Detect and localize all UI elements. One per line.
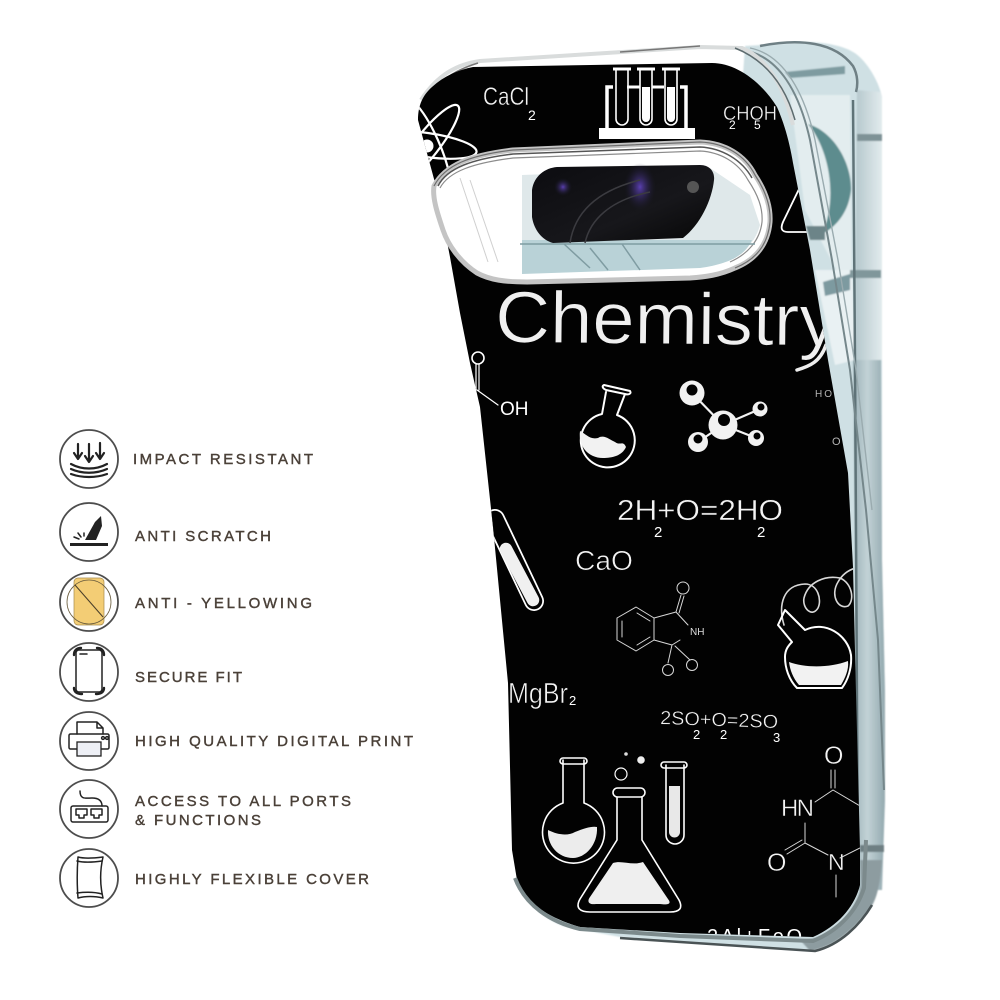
equation: sulfur: 2	[693, 727, 700, 742]
dark bottom right corner	[800, 860, 882, 951]
feature: highly flexible cover	[60, 849, 369, 907]
case print artwork	[376, 69, 860, 948]
case outline curves	[742, 50, 884, 790]
feature: secure fit	[60, 643, 242, 701]
icon: left test tube	[495, 519, 534, 601]
structure: uracil: O	[824, 742, 843, 770]
frame bars	[785, 66, 845, 78]
white glare panels	[790, 95, 852, 300]
formula: CaCl2: 2	[528, 107, 536, 123]
icon: coil flask	[778, 568, 856, 688]
panel: camera cutout	[434, 142, 770, 282]
feature: high quality digital print: HIGH QUALITY DIGITAL PRINT	[135, 733, 413, 750]
formula: C2H5OH: 5	[754, 118, 761, 132]
feature: impact resistant: IMPACT RESISTANT	[133, 451, 313, 468]
feature: access to all ports and functions	[60, 780, 351, 838]
title: Chemistry: Chemistry	[495, 277, 838, 362]
formula fragments at right edge: O	[832, 436, 841, 448]
black printed case back	[418, 63, 860, 937]
feature: anti scratch	[60, 503, 271, 561]
structure: COOH	[472, 352, 528, 420]
icon: test tube rack	[599, 69, 695, 139]
icon: erlenmeyer flask	[578, 752, 681, 912]
structure: saccharin	[617, 582, 704, 676]
icon: triangle flask	[780, 189, 807, 233]
equation: sulfur	[661, 710, 780, 742]
back phone body	[517, 42, 885, 951]
equation: water	[618, 500, 782, 537]
equation: sulfur: 2	[720, 727, 727, 742]
formula: MgBr2: 2	[569, 693, 576, 708]
feature: high quality digital print	[60, 712, 413, 770]
structure: COOH: OH	[500, 399, 528, 420]
icon: molecule	[680, 380, 768, 452]
feature: access to all ports and functions: ACCESS TO ALL PORTS	[135, 793, 351, 810]
camera ring behind the case	[808, 124, 851, 234]
feature: secure fit: SECURE FIT	[135, 669, 242, 686]
camera lens black pill	[532, 165, 714, 243]
formula: CaCl2	[484, 87, 536, 120]
equation: sulfur: 2SO+O=2SO	[660, 708, 778, 733]
icon: round flask	[580, 385, 635, 467]
panel: phone and clear case	[376, 42, 885, 951]
formula: cut off at bottom: 2Al+FeO	[707, 926, 802, 948]
structure: uracil	[767, 742, 860, 897]
feature: impact resistant	[60, 430, 313, 488]
feature: anti yellowing: ANTI - YELLOWING	[135, 595, 312, 612]
equation: water: 2	[757, 524, 765, 541]
icon: standing test tube	[661, 762, 687, 844]
structure: uracil: O	[767, 849, 786, 877]
equation: sulfur: 3	[773, 730, 780, 745]
feature: highly flexible cover: HIGHLY FLEXIBLE COVER	[135, 871, 369, 888]
lower light blue band	[522, 240, 752, 274]
structure: uracil: HN	[781, 795, 814, 822]
icon: atom	[419, 104, 478, 180]
formula: MgBr2: MgBr	[508, 678, 568, 710]
equation: water: 2H+O=2HO	[617, 495, 783, 527]
vertical seam	[853, 100, 858, 880]
formula: C2H5OH	[724, 106, 776, 129]
formula: CaCl2: CaCl	[483, 83, 529, 111]
right metal side strip	[855, 90, 882, 360]
feature: access to all ports and functions: & FUNCTIONS	[135, 812, 261, 829]
structure: saccharin: NH	[690, 627, 704, 638]
formula fragments at right edge: HO	[815, 389, 834, 400]
formula: C2H5OH: CHOH	[723, 103, 777, 125]
formula fragments at right edge	[816, 390, 840, 445]
formula: CaO: CaO	[575, 545, 633, 576]
feature: anti scratch: ANTI SCRATCH	[135, 528, 271, 545]
equation: water: 2	[654, 524, 662, 541]
formula: C2H5OH: 2	[729, 118, 736, 132]
feature: anti yellowing	[60, 573, 312, 631]
bottom case edge	[515, 840, 866, 941]
structure: uracil: N	[828, 849, 845, 875]
top clear case lip	[421, 47, 793, 125]
icon: bottom round flask	[542, 758, 604, 863]
